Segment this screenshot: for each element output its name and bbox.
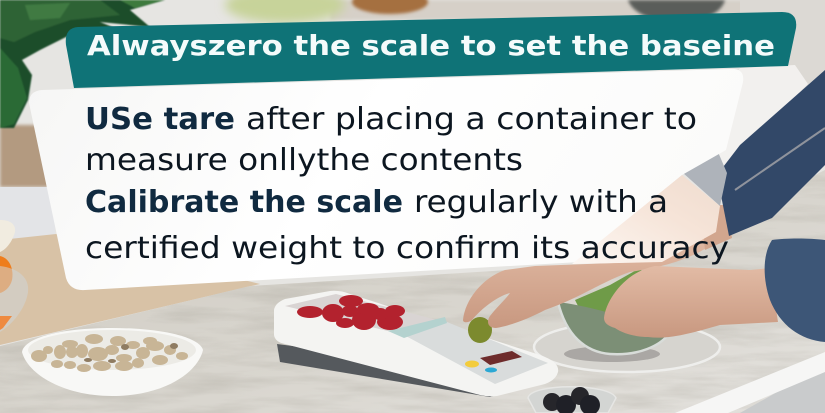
body text block	[85, 102, 729, 266]
real wrist behind sleeve	[700, 205, 732, 250]
green weighed ball	[468, 317, 492, 343]
title ribbon	[66, 12, 796, 88]
line 3 regular: regularly with a	[414, 185, 668, 220]
plate under salad bowl	[534, 322, 720, 372]
scale teal strip	[388, 317, 447, 338]
blue button	[485, 368, 497, 372]
left edge bowl with orange	[0, 220, 28, 332]
yellow button	[465, 360, 479, 368]
scale control panel	[404, 322, 548, 384]
scale tray	[285, 294, 445, 333]
background metal bowl	[628, 0, 725, 22]
icon: leafy plant top left	[0, 0, 165, 128]
dark berries cup	[528, 387, 616, 413]
salad bowl with greens	[558, 268, 668, 354]
line 1 bold: USe tare	[85, 102, 235, 137]
background blurred terracotta bowl	[352, 0, 428, 14]
right arm and hand	[604, 266, 778, 338]
upper denim sleeve	[682, 70, 825, 236]
title text: Alwayszero the scale to set the baseine	[87, 29, 775, 62]
nut dish	[22, 328, 203, 396]
left arm and hand	[463, 235, 718, 328]
scale dark base	[277, 344, 530, 397]
line 1 regular: after placing a container to	[246, 102, 697, 137]
back translucent panel	[690, 65, 808, 170]
line 2: measure onllythe contents	[85, 143, 523, 178]
white text card	[29, 69, 743, 290]
lower denim sleeve	[765, 238, 825, 342]
scale white body	[274, 291, 558, 396]
digital kitchen scale	[274, 291, 558, 397]
line 4: certified weight to confirm its accuracy	[85, 231, 729, 266]
raspberries	[297, 295, 405, 330]
line 3 bold: Calibrate the scale	[85, 185, 403, 220]
scale display	[480, 351, 522, 365]
arm seen through card	[572, 175, 720, 264]
background blurred green fruit	[225, 0, 345, 23]
